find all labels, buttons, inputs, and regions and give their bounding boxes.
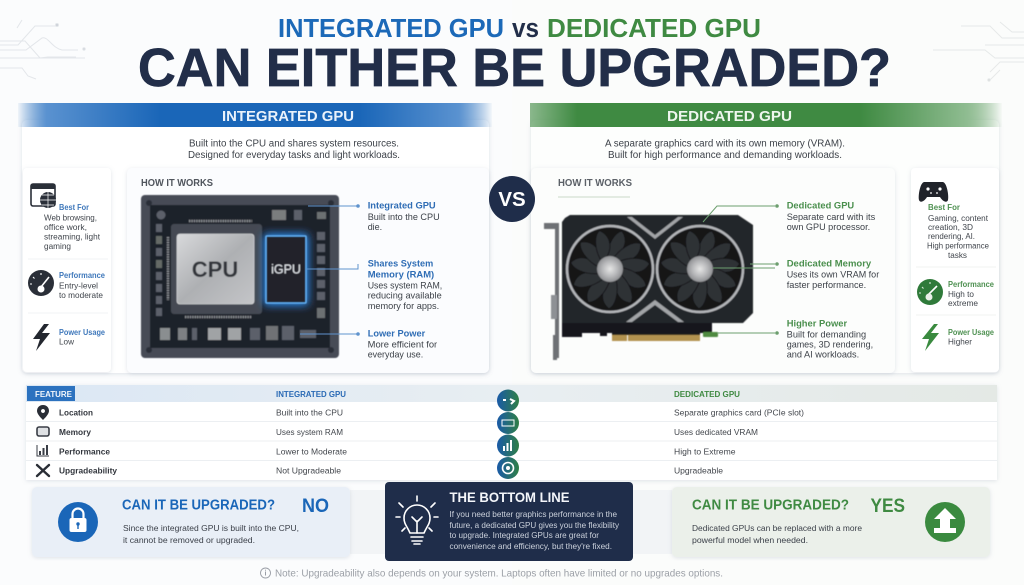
icon: gamepad — [919, 182, 948, 202]
icon: gauge — [28, 270, 54, 296]
text: performance — [948, 280, 995, 308]
answer: no: NO — [302, 496, 329, 517]
text: performance: extreme — [948, 298, 978, 308]
callout: lower power — [368, 328, 437, 360]
text: explanation: powerful model when needed. — [692, 535, 808, 545]
description: dedicated gpu: Built for high performance and demanding workloads. — [608, 150, 842, 161]
text: power usage — [59, 328, 105, 346]
row: memory: Memory — [59, 427, 91, 437]
band behind bottom cards — [350, 490, 672, 554]
illustration: cpu die with igpu — [141, 195, 339, 358]
panel: dedicated gpu — [530, 103, 1002, 373]
text: best for: creation, 3D — [928, 222, 973, 232]
text: explanation — [692, 523, 862, 545]
title: integrated vs dedicated — [278, 15, 761, 43]
row: upgradeability: Upgradeable — [674, 466, 723, 476]
title: integrated vs dedicated: vs — [512, 15, 539, 43]
callout: higher power: games, 3D rendering, — [787, 340, 873, 350]
text: best for: gaming — [44, 241, 71, 251]
sidebar: integrated facts — [23, 168, 111, 372]
callout: higher power: and AI workloads. — [787, 350, 859, 360]
pcb — [562, 320, 712, 333]
header: integrated gpu — [18, 103, 492, 127]
row: upgradeability: Upgradeability — [59, 466, 117, 476]
answer: yes: YES — [870, 496, 905, 517]
callout: shares system memory: memory for apps. — [368, 301, 439, 311]
callout: shares system memory: Memory (RAM) — [368, 270, 434, 280]
center icon column — [497, 390, 519, 479]
callout: integrated gpu — [368, 200, 440, 232]
igpu glow — [264, 234, 308, 305]
callout: lower power: Lower Power — [368, 328, 425, 340]
card: integrated upgrade answer — [32, 487, 350, 557]
row: upgradeability: Not Upgradeable — [276, 466, 341, 476]
fan right — [657, 226, 743, 312]
cpu lid — [177, 234, 254, 304]
icon: performance badge — [497, 434, 519, 456]
callout: dedicated gpu: Dedicated GPU — [787, 200, 854, 212]
column header: feature: FEATURE — [35, 389, 72, 399]
header: dedicated gpu — [530, 103, 1002, 127]
text: best for — [44, 203, 101, 251]
label: cpu: CPU — [192, 257, 238, 282]
description: dedicated gpu — [605, 138, 845, 161]
description: integrated gpu: Designed for everyday tasks and light workloads. — [188, 150, 400, 161]
callout: dedicated gpu: Separate card with its — [787, 212, 876, 222]
text: performance: Performance — [948, 280, 995, 289]
text: explanation: Dedicated GPUs can be replaced with a more — [692, 523, 862, 533]
heading: how it works: HOW IT WORKS — [141, 177, 213, 189]
column header: feature — [27, 386, 75, 401]
header: dedicated gpu: DEDICATED GPU — [667, 109, 792, 125]
igpu block — [266, 236, 306, 303]
callout: lower power: More efficient for — [368, 339, 437, 349]
icon: upgrade arrow — [925, 502, 965, 542]
text: performance: High to — [948, 289, 974, 299]
text: best for: Best For — [59, 203, 89, 212]
callout: higher power: Higher Power — [787, 318, 847, 330]
icon: upgrade badge — [497, 457, 519, 479]
row: location: Built into the CPU — [276, 408, 343, 418]
text: power usage: Higher — [948, 336, 972, 346]
text: best for — [927, 203, 989, 260]
card: dedicated upgrade answer — [672, 487, 990, 557]
header: integrated gpu: INTEGRATED GPU — [222, 109, 354, 125]
heading: can it be upgraded: CAN IT BE UPGRADED? — [692, 498, 849, 514]
sub-panel: how it works — [531, 168, 895, 373]
row: upgradeability — [37, 465, 723, 476]
row: performance: High to Extreme — [674, 446, 736, 456]
text: best for: Gaming, content — [928, 213, 989, 223]
pcie connector — [612, 333, 627, 341]
text: explanation: it cannot be removed or upgraded. — [123, 535, 255, 545]
row: location: Separate graphics card (PCIe slot) — [674, 408, 804, 418]
title: integrated vs dedicated: INTEGRATED GPU — [278, 15, 504, 43]
icon: lightning bolt — [33, 324, 50, 351]
illustration: graphics card — [544, 215, 753, 360]
text: bottom line body: to upgrade. Integrated GPUs are great for — [450, 530, 599, 540]
callout: higher power — [787, 318, 873, 360]
text: bottom line body: convenience and efficiency, but they're fixed. — [450, 541, 612, 551]
decoration: circuit lines left — [0, 20, 85, 79]
text: bottom line body — [450, 509, 620, 551]
callout: shares system memory: Uses system RAM, — [368, 280, 442, 290]
fan left — [567, 226, 653, 312]
callout lines — [300, 205, 359, 335]
row: location — [37, 405, 804, 420]
title: integrated vs dedicated: DEDICATED GPU — [547, 15, 761, 43]
row: memory — [37, 427, 758, 437]
callout: dedicated memory: Dedicated Memory — [787, 258, 872, 270]
icon: lock — [58, 502, 98, 542]
heading: can it be upgraded: CAN IT BE UPGRADED? — [122, 498, 275, 514]
description: integrated gpu — [188, 138, 400, 161]
text: bottom line body: future, a dedicated GPU gives you the flexibility — [450, 520, 620, 530]
title: main question: CAN EITHER BE UPGRADED? — [138, 39, 891, 98]
callout: integrated gpu: die. — [368, 222, 382, 232]
row: performance: Performance — [59, 446, 110, 456]
footnote: Note: Upgradeability also depends on your system. Laptops often have limited or no upgrades options. — [275, 568, 723, 580]
text: performance: Entry-level — [59, 280, 98, 290]
vs badge: VS — [498, 188, 526, 211]
callout: dedicated gpu — [787, 200, 876, 232]
icon: green bolt — [922, 324, 939, 351]
callout: lower power: everyday use. — [368, 350, 423, 360]
text: best for: Web browsing, — [44, 212, 97, 222]
callout: shares system memory: Shares System — [368, 258, 433, 270]
callout: shares system memory: reducing available — [368, 290, 442, 300]
column header: dedicated gpu: DEDICATED GPU — [674, 390, 740, 399]
callout: shares system memory — [368, 258, 442, 311]
text: performance — [59, 271, 106, 300]
sub-panel: how it works — [127, 168, 489, 373]
small chips — [156, 210, 326, 340]
description: integrated gpu: Built into the CPU and shares system resources. — [189, 138, 399, 150]
callout lines — [703, 205, 778, 334]
text: explanation: Since the integrated GPU is built into the CPU, — [123, 523, 299, 533]
column header: integrated gpu: INTEGRATED GPU — [276, 390, 346, 399]
label: igpu: iGPU — [271, 262, 301, 276]
icon: green gauge — [917, 279, 943, 305]
bracket — [544, 223, 559, 360]
text: explanation — [123, 523, 299, 545]
row: location: Location — [59, 408, 93, 418]
callout: dedicated memory — [787, 258, 879, 290]
card: the bottom line — [385, 482, 633, 561]
icon: browser with globe — [31, 184, 56, 208]
callout: dedicated memory: faster performance. — [787, 280, 866, 290]
text: power usage: Power Usage — [948, 328, 994, 337]
decoration: circuit lines right — [933, 22, 1024, 81]
text: best for: Best For — [928, 203, 960, 212]
description: dedicated gpu: A separate graphics card with its own memory (VRAM). — [605, 138, 845, 150]
row: performance: Lower to Moderate — [276, 446, 347, 456]
heading: how it works: HOW IT WORKS — [558, 177, 632, 189]
icon: memory badge — [497, 412, 519, 434]
text: best for: rendering, AI. — [928, 231, 975, 241]
text: performance: Performance — [59, 271, 106, 280]
panel: integrated gpu — [18, 103, 492, 373]
text: power usage: Power Usage — [59, 328, 105, 337]
icon: location badge — [497, 390, 519, 412]
row: memory: Uses system RAM — [276, 427, 343, 437]
text: performance: to moderate — [59, 290, 103, 300]
text: power usage — [948, 328, 994, 346]
icon: light bulb — [396, 496, 438, 544]
callout: integrated gpu: Integrated GPU — [368, 200, 436, 212]
cpu package — [171, 224, 262, 314]
text: power usage: Low — [59, 336, 75, 346]
callout: higher power: Built for demanding — [787, 330, 866, 340]
text: best for: High performance — [927, 240, 989, 250]
sidebar: dedicated facts — [911, 168, 999, 372]
callout: integrated gpu: Built into the CPU — [368, 212, 440, 222]
shroud — [562, 215, 753, 323]
comparison table — [26, 385, 997, 480]
heading: the bottom line: THE BOTTOM LINE — [450, 489, 570, 505]
text: bottom line body: If you need better graphics performance in the — [450, 509, 617, 519]
text: best for: tasks — [948, 250, 967, 260]
row: memory: Uses dedicated VRAM — [674, 427, 758, 437]
callout: dedicated gpu: own GPU processor. — [787, 222, 870, 232]
callout: dedicated memory: Uses its own VRAM for — [787, 270, 879, 280]
text: best for: office work, — [44, 222, 87, 232]
vs badge — [489, 176, 535, 222]
row: performance — [37, 445, 736, 456]
text: best for: streaming, light — [44, 232, 101, 242]
